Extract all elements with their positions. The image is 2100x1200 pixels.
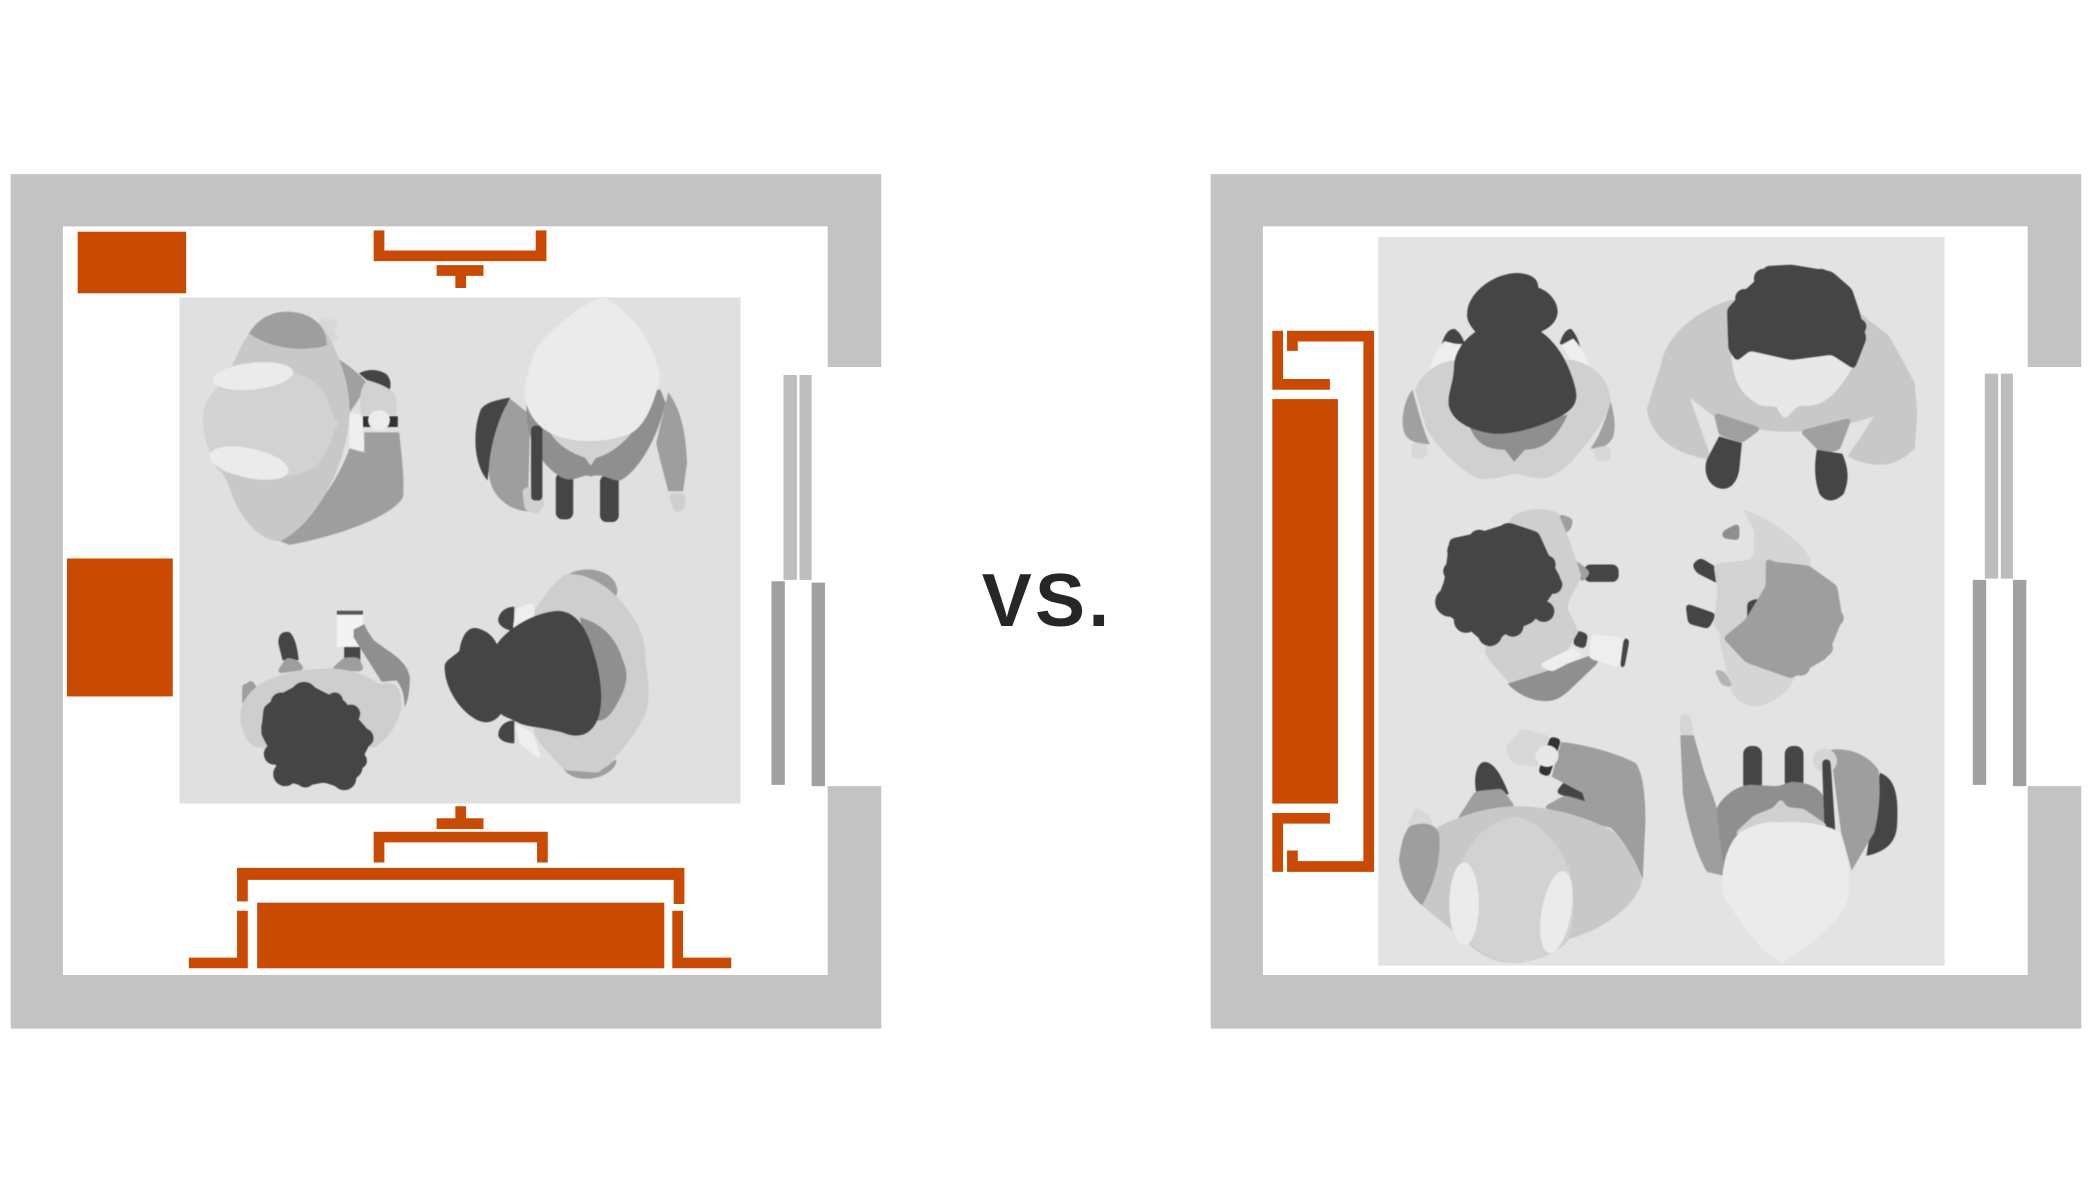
panel: left room [11,174,881,1029]
left room carpet [179,297,741,804]
person: dark hair facing left, bottom right [445,570,649,779]
left room wall [11,174,881,1029]
panel: right room [1211,174,2081,1029]
left room door lower [771,581,825,786]
right room door upper [1985,374,2013,579]
person: watch wearer, bottom left [1399,729,1645,963]
left room door upper [783,375,812,580]
person: white hair with backpack, bottom right [1680,714,1897,963]
left room top-left cabinet [78,232,186,293]
person: facing right, top left [203,312,403,545]
left room bottom chair [374,806,548,862]
left room left cabinet [67,558,173,696]
right room wall [1211,174,2081,1029]
left room top chair [374,230,546,288]
person: long dark hair bun, top left [1403,273,1615,479]
left room table [257,903,664,968]
person: curly dark hair, top right [1647,265,1917,500]
right room top bench arm [1272,331,1330,390]
person: grey hair, middle right [1686,510,1844,706]
person: white hair, top right [475,297,687,522]
person: phone user, bottom left [240,611,410,790]
right room door lower [1973,580,2026,786]
left room sofa back [237,868,684,904]
right room carpet [1378,237,1945,966]
left room sofa arms [189,911,731,968]
person: tablet user, middle left [1435,509,1629,701]
right room long table [1272,399,1338,804]
right room bottom bench arm [1272,813,1330,872]
comparison label: VS. [982,558,1113,642]
right room bench back [1287,331,1374,872]
